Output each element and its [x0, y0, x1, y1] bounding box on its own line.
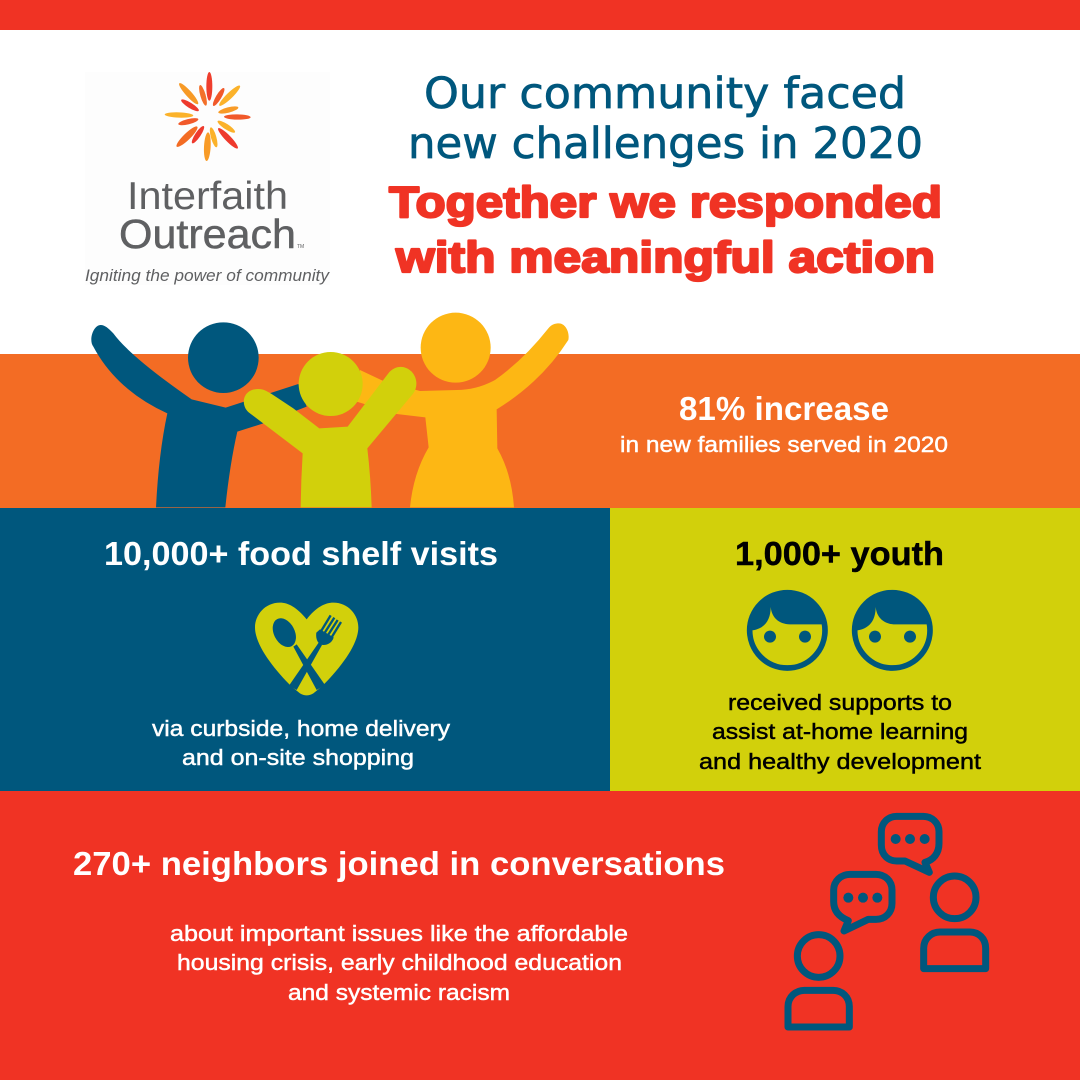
icon: heart with spoon and fork	[255, 603, 358, 695]
icon: left person	[788, 935, 849, 1027]
text: youth details	[699, 690, 981, 774]
text: food shelf details: and on-site shopping	[182, 745, 414, 770]
panel: food shelf visits	[0, 508, 610, 791]
panel: youth	[610, 508, 1080, 791]
icon: two people talking	[788, 816, 986, 1027]
icon: left face	[747, 591, 827, 668]
heading: meaningful action: with meaningful action	[395, 233, 935, 282]
stat: food shelf visits: 10,000+ food shelf visits	[104, 535, 498, 572]
stat: youth: 1,000+ youth	[735, 535, 944, 572]
heading: community challenges	[408, 69, 923, 169]
stat: new families	[620, 390, 948, 457]
heading: meaningful action	[389, 178, 942, 282]
icon: right person	[924, 876, 986, 969]
stat: neighbors: 270+ neighbors joined in conversations	[73, 845, 725, 882]
panel: neighbors conversations	[0, 791, 1080, 1080]
text: youth details: assist at-home learning	[712, 719, 968, 744]
text: food shelf details: via curbside, home delivery	[152, 716, 450, 741]
heading: meaningful action: Together we responded	[389, 178, 942, 227]
heading: community challenges: new challenges in 2020	[408, 119, 923, 169]
icon: two children's faces	[747, 591, 932, 668]
icon: lower speech bubble	[834, 874, 892, 931]
stat: new families: in new families served in 2020	[620, 432, 948, 457]
trademark: TM	[297, 244, 304, 250]
text: youth details: received supports to	[728, 690, 952, 715]
heading: community challenges: Our community faced	[424, 69, 906, 119]
logo wordmark: Interfaith: Interfaith	[127, 175, 288, 218]
illustration: family with raised arms	[91, 313, 569, 507]
text: conversation details: and systemic racism	[288, 980, 510, 1005]
text: food shelf details	[152, 716, 450, 770]
logo wordmark: Outreach: Outreach	[119, 211, 296, 257]
panel: orange statistic band	[0, 354, 1080, 508]
stat: new families: 81% increase	[679, 390, 889, 427]
figure: child in green	[244, 352, 416, 507]
text: conversation details: housing crisis, early childhood education	[177, 950, 622, 975]
text: conversation details: about important issues like the affordable	[170, 921, 628, 946]
logo tagline: Igniting the power of community	[85, 267, 331, 285]
figure: adult in blue	[91, 322, 307, 507]
icon: upper speech bubble	[881, 816, 939, 872]
text: conversation details	[170, 921, 628, 1005]
text: youth details: and healthy development	[699, 749, 981, 774]
logo: Interfaith Outreach	[85, 72, 331, 285]
icon: right face	[852, 591, 932, 668]
top red band	[0, 0, 1080, 30]
figure: adult in yellow	[357, 313, 569, 507]
icon: sunburst	[165, 72, 251, 161]
